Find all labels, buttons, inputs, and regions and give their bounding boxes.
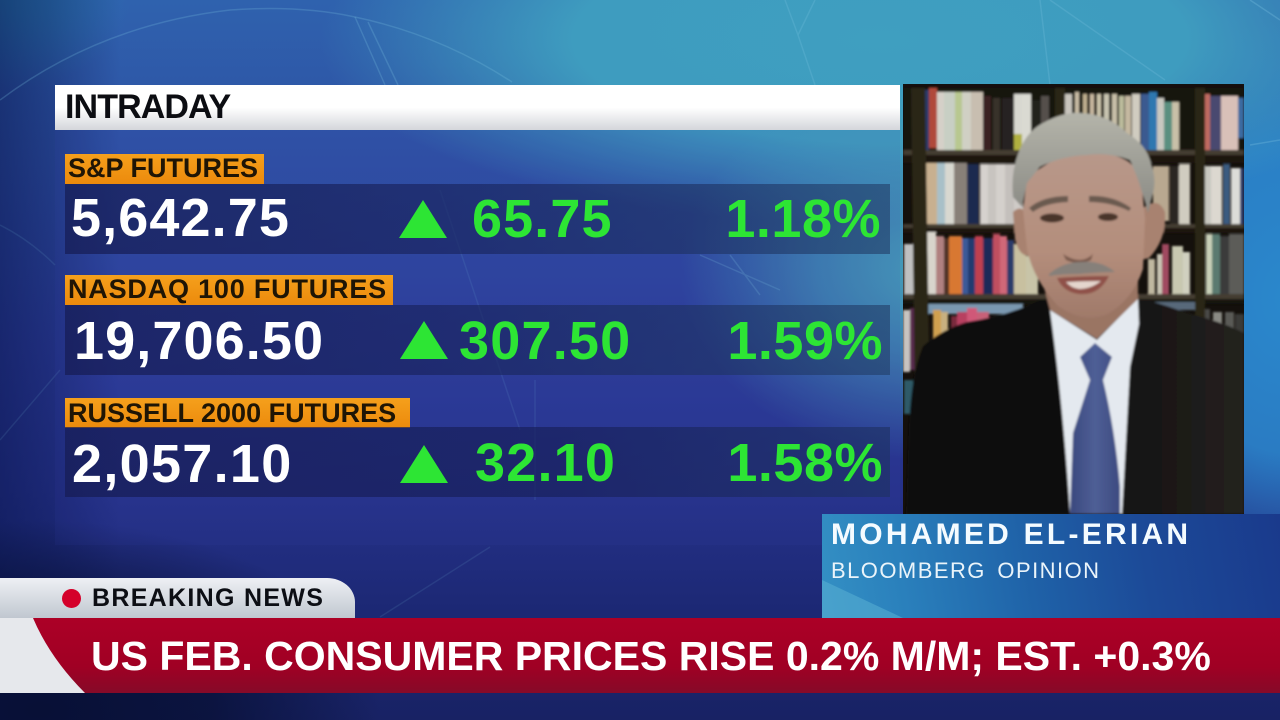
tie xyxy=(1070,343,1120,514)
hair xyxy=(1012,113,1154,213)
face xyxy=(1023,152,1145,318)
breaking news tab xyxy=(0,578,355,618)
row: Russell 2000 futures xyxy=(65,427,890,497)
mouth xyxy=(1057,276,1109,294)
icon: up triangle xyxy=(400,321,448,359)
value: 2,057.10 xyxy=(72,434,293,494)
percent: 1.59% xyxy=(727,311,883,371)
icon: up triangle xyxy=(400,445,448,483)
lower third: speaker name xyxy=(822,514,1280,618)
brows xyxy=(1029,196,1068,212)
change: 32.10 xyxy=(475,433,616,493)
heading: intraday xyxy=(55,85,900,130)
label: Nasdaq 100 futures: NASDAQ 100 FUTURES xyxy=(68,274,387,304)
panel: intraday market data xyxy=(55,130,900,545)
heading: intraday: INTRADAY xyxy=(65,88,230,126)
breaking news label: BREAKING NEWS xyxy=(92,584,324,612)
icon: red dot xyxy=(62,589,81,608)
change: 307.50 xyxy=(459,311,631,371)
shirt xyxy=(1050,298,1139,514)
value: 5,642.75 xyxy=(71,188,290,248)
row: S&P futures xyxy=(65,184,890,254)
light wedge xyxy=(822,580,902,618)
white wedge xyxy=(0,618,85,693)
moustache xyxy=(1049,262,1115,276)
value: 19,706.50 xyxy=(74,311,324,371)
icon: up triangle xyxy=(399,200,447,238)
headline text: US FEB. CONSUMER PRICES RISE 0.2% M/M; EST. +0.3% xyxy=(91,633,1211,679)
eyes xyxy=(1040,214,1064,222)
neck xyxy=(1043,274,1138,339)
name: MOHAMED EL-ERIAN xyxy=(831,518,1191,551)
label: Russell 2000 futures: RUSSELL 2000 FUTURES xyxy=(68,398,396,428)
ears xyxy=(1013,208,1029,256)
affiliation: BLOOMBERG OPINION xyxy=(831,558,1100,583)
bookshelf xyxy=(903,84,1244,414)
label: S&P futures: S&P FUTURES xyxy=(68,153,258,183)
headline banner xyxy=(0,618,1280,693)
percent: 1.18% xyxy=(725,189,881,249)
nose shadow xyxy=(1063,254,1093,263)
row: Nasdaq 100 futures xyxy=(65,305,890,375)
suit xyxy=(906,300,1244,514)
percent: 1.58% xyxy=(727,433,883,493)
video panel: speaker in front of bookshelf xyxy=(903,84,1244,514)
change: 65.75 xyxy=(472,189,613,249)
teeth xyxy=(1066,281,1101,289)
